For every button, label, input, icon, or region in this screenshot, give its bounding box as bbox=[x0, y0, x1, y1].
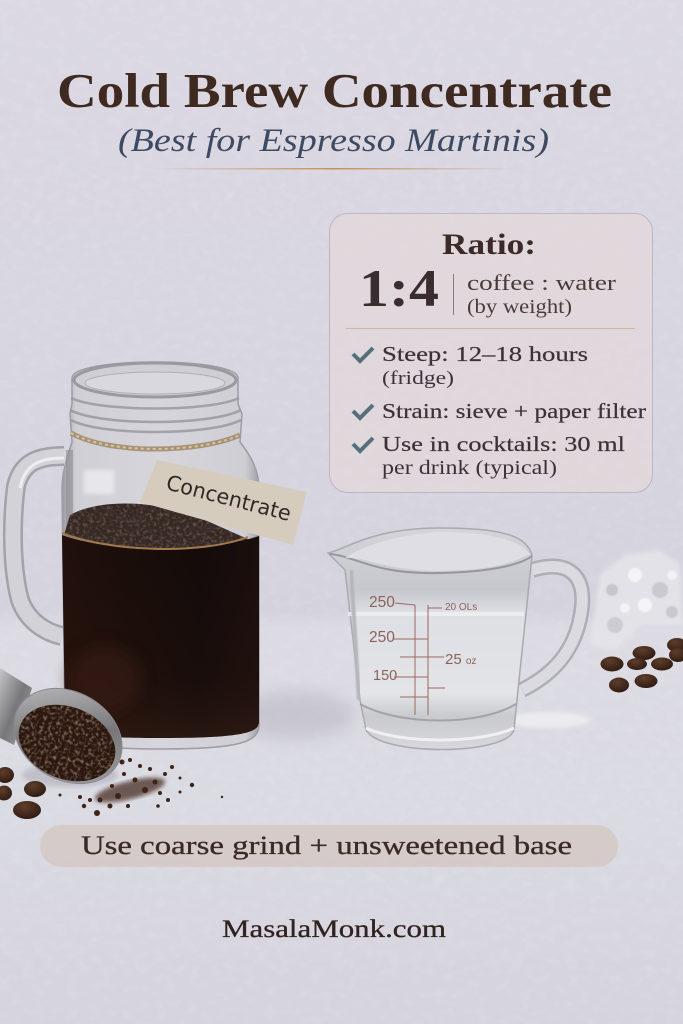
step: steep: Steep: 12–18 hours bbox=[382, 342, 588, 366]
measurement scale: 20 OLs bbox=[445, 602, 477, 613]
step: use in cocktails bbox=[353, 432, 625, 479]
illustration: measuring cup of water bbox=[328, 528, 590, 750]
jar handle bbox=[13, 456, 64, 636]
jar glass bbox=[62, 362, 259, 749]
background wall bbox=[0, 0, 683, 620]
callout: tip pill bbox=[40, 825, 618, 867]
measurement scale: 25 oz bbox=[445, 651, 476, 668]
step: steep bbox=[353, 342, 588, 389]
twine bbox=[71, 433, 240, 449]
ratio value 1:4: 1:4 bbox=[359, 260, 439, 318]
heading: ratio: Ratio: bbox=[442, 228, 536, 261]
label tag bbox=[140, 460, 307, 545]
label tag: Concentrate bbox=[164, 471, 294, 526]
illustration: scoop of coarse grounds bbox=[0, 668, 139, 803]
spilled grounds bbox=[58, 758, 223, 816]
cup body bbox=[328, 528, 532, 750]
callout: tip pill: Use coarse grind + unsweetened base bbox=[81, 831, 572, 860]
footer: website: MasalaMonk.com bbox=[222, 916, 447, 943]
step: use in cocktails: Use in cocktails: 30 ml bbox=[382, 432, 625, 456]
measurement scale: 250 bbox=[369, 629, 395, 646]
step: steep: (fridge) bbox=[382, 368, 454, 389]
panel: ratio and steps bbox=[330, 214, 652, 492]
coffee beans left bbox=[0, 767, 46, 819]
table surface bbox=[0, 612, 683, 1024]
coffee grounds layer bbox=[64, 504, 250, 550]
measurement scale: 250 bbox=[369, 594, 395, 611]
illustration: shadow beneath jar bbox=[235, 691, 355, 739]
ratio description: coffee : water bbox=[467, 270, 617, 295]
cup handle bbox=[522, 567, 582, 690]
liquid bbox=[62, 535, 259, 738]
ratio description bbox=[467, 270, 617, 318]
step: use in cocktails: per drink (typical) bbox=[382, 457, 557, 479]
ice chunk bbox=[590, 550, 683, 650]
coffee beans right bbox=[600, 638, 683, 692]
ratio description: (by weight) bbox=[467, 296, 572, 318]
subtitle: (Best for Espresso Martinis) bbox=[118, 123, 549, 159]
illustration: mason jar of concentrate bbox=[13, 362, 307, 749]
step: strain: Strain: sieve + paper filter bbox=[382, 399, 646, 423]
title: Cold Brew Concentrate bbox=[57, 63, 612, 118]
measurement scale: 150 bbox=[373, 668, 397, 684]
measurement scale bbox=[369, 594, 477, 715]
